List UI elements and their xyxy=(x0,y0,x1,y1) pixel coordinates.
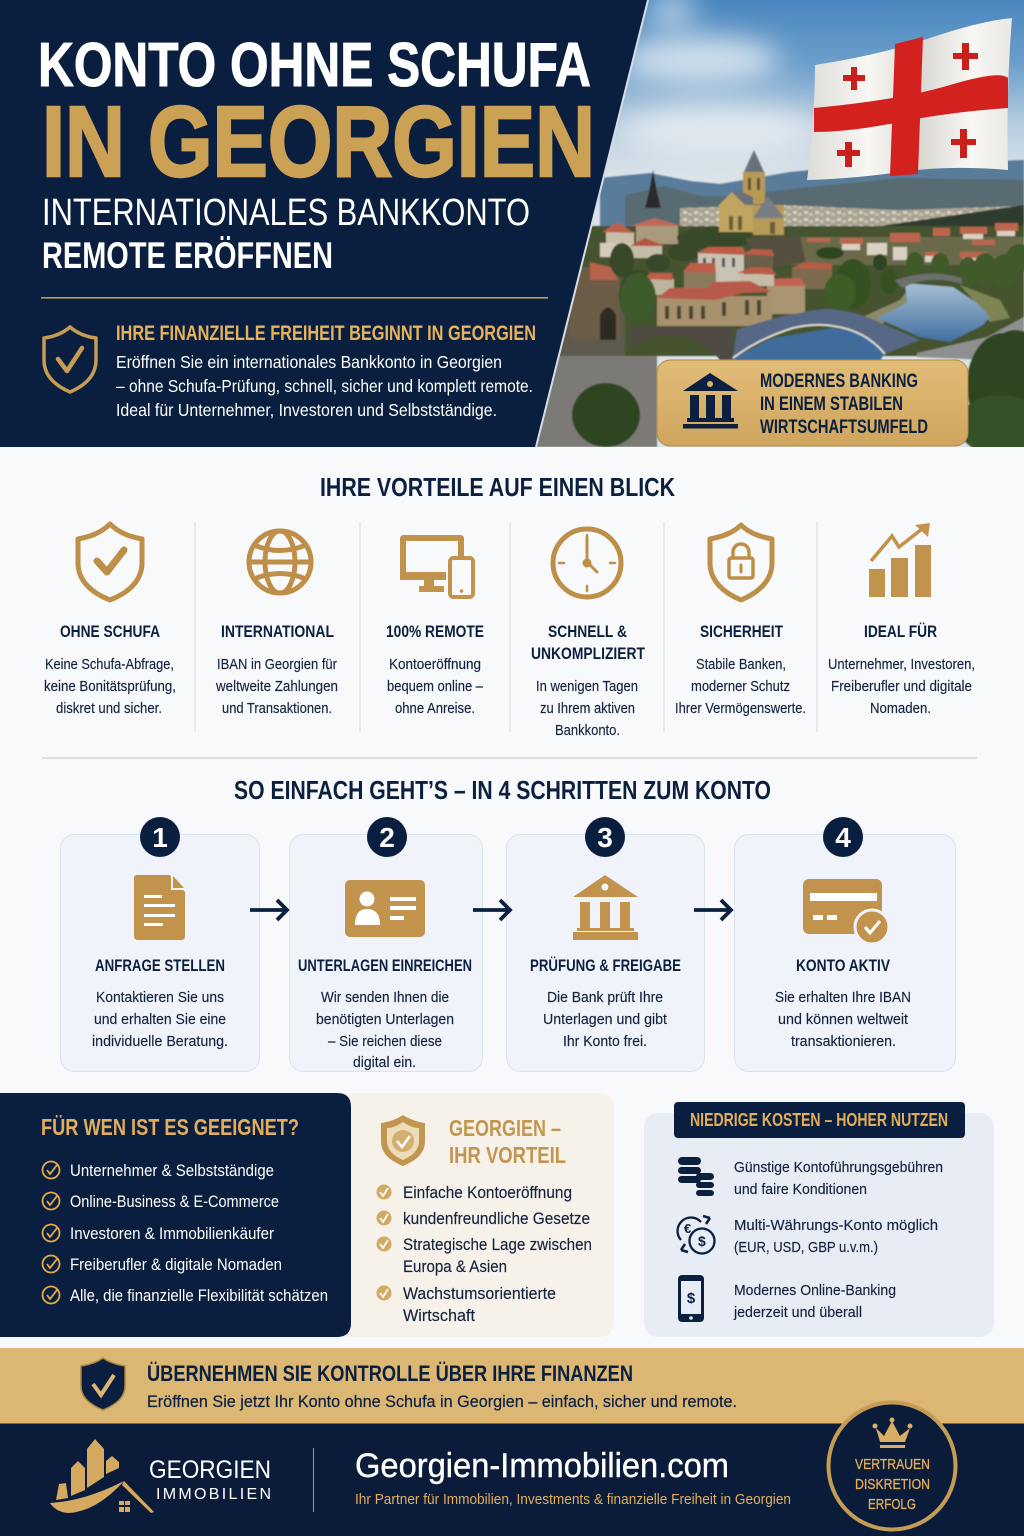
CTA copy: Eröffnen Sie jetzt Ihr Konto ohne Schufa in Georgien – einfach, sicher und remote. xyxy=(147,1392,737,1411)
benefit: sicherheit: Stabile Banken, xyxy=(696,656,786,673)
Georgian flag xyxy=(807,18,1012,180)
benefit: international: weltweite Zahlungen xyxy=(215,678,338,695)
arrow 3 xyxy=(694,900,731,920)
icon: document xyxy=(134,874,186,940)
step 4 card xyxy=(734,817,956,1072)
benefit: international: IBAN in Georgien für xyxy=(217,656,337,673)
step 3 card: Ihr Konto frei. xyxy=(563,1033,647,1050)
icon: ID card xyxy=(345,880,425,937)
title line 2: IN GEORGIEN xyxy=(42,86,595,198)
icon: growth chart xyxy=(869,523,931,597)
benefit: ohne Schufa: Keine Schufa-Abfrage, xyxy=(45,656,174,673)
heading: steps: SO EINFACH GEHT’S – IN 4 SCHRITTEN ZUM KONTO xyxy=(234,775,771,805)
benefit: ideal für: IDEAL FÜR xyxy=(864,622,937,641)
list: Freiberufler & digitale Nomaden xyxy=(70,1256,282,1274)
callout text: MODERNES BANKING xyxy=(760,371,918,392)
panel heading: FÜR WEN IST ES GEEIGNET? xyxy=(41,1114,299,1140)
benefit: schnell: zu Ihrem aktiven xyxy=(540,700,635,717)
step 2 card: UNTERLAGEN EINREICHEN xyxy=(298,956,472,975)
subtitle line 2: REMOTE ERÖFFNEN xyxy=(42,235,333,276)
church xyxy=(719,150,784,235)
benefit: schnell: In wenigen Tagen xyxy=(536,678,638,695)
step 3 card: Die Bank prüft Ihre xyxy=(547,989,663,1006)
header left panel xyxy=(0,0,660,447)
benefit: ohne Schufa xyxy=(44,524,176,717)
icon: currency exchange: $ xyxy=(698,1233,706,1249)
step 2 card: Wir senden Ihnen die xyxy=(321,989,449,1006)
panel: beige advantage xyxy=(330,1093,614,1337)
number badge 3: 3 xyxy=(597,822,613,853)
list: Investoren & Immobilienkäufer xyxy=(70,1225,274,1243)
subtitle line 1: INTERNATIONALES BANKKONTO xyxy=(42,192,530,234)
intro copy: Eröffnen Sie ein internationales Bankkonto in Georgien xyxy=(116,352,502,372)
stone bridge left xyxy=(630,327,733,360)
benefit: schnell: SCHNELL & xyxy=(548,622,627,641)
foreground trees xyxy=(572,330,1024,455)
benefit: remote: 100% REMOTE xyxy=(386,622,484,641)
step 4 card: Sie erhalten Ihre IBAN xyxy=(775,989,911,1006)
callout text: IN EINEM STABILEN xyxy=(760,394,903,415)
main title xyxy=(38,31,595,276)
benefit: sicherheit: moderner Schutz xyxy=(691,678,790,695)
benefit: ohne Schufa: OHNE SCHUFA xyxy=(60,622,160,641)
panel header: NIEDRIGE KOSTEN – HOHER NUTZEN xyxy=(690,1110,948,1130)
benefit: schnell xyxy=(531,529,645,739)
number badge 4: 4 xyxy=(835,822,851,853)
logo xyxy=(50,1439,271,1513)
list xyxy=(70,1162,328,1305)
icon: credit card check xyxy=(803,879,889,944)
step 1 card: Kontaktieren Sie uns xyxy=(96,989,224,1006)
number badge 1: 1 xyxy=(152,822,168,853)
central trees xyxy=(824,259,898,310)
benefit: international xyxy=(215,531,338,717)
benefit: international: und Transaktionen. xyxy=(222,700,332,717)
icon: gold shield xyxy=(381,1115,425,1166)
gold rule xyxy=(41,297,548,299)
step 1 card xyxy=(60,817,260,1072)
main red roof building xyxy=(657,281,772,326)
list: Einfache Kontoeröffnung xyxy=(403,1184,572,1202)
step 3 card: PRÜFUNG & FREIGABE xyxy=(530,956,681,975)
step 4 card: transaktionieren. xyxy=(791,1033,896,1050)
trust seal: VERTRAUEN xyxy=(855,1456,930,1473)
callout text xyxy=(760,371,928,438)
icon: currency exchange xyxy=(678,1216,714,1254)
icon: navy shield xyxy=(81,1358,125,1410)
number badge 4 xyxy=(823,817,863,857)
icon: coins xyxy=(678,1157,714,1196)
step 2 card xyxy=(290,817,482,1072)
icon: clock xyxy=(553,529,621,597)
icon: devices xyxy=(400,535,473,597)
benefit: sicherheit: Ihrer Vermögenswerte. xyxy=(675,700,806,717)
distant red-roofed quarter xyxy=(790,223,1024,270)
embankment xyxy=(864,292,908,324)
intro heading: IHRE FINANZIELLE FREIHEIT BEGINNT IN GEORGIEN xyxy=(116,322,536,345)
benefit: ohne Schufa: keine Bonitätsprüfung, xyxy=(44,678,176,695)
step 4 card: und können weltweit xyxy=(778,1011,909,1028)
panel heading xyxy=(449,1115,566,1168)
list: Europa & Asien xyxy=(403,1258,507,1276)
CTA heading: ÜBERNEHMEN SIE KONTROLLE ÜBER IHRE FINANZEN xyxy=(147,1361,633,1386)
logo: GEORGIEN xyxy=(149,1456,271,1484)
icon: shield lock xyxy=(710,525,772,600)
icon: currency exchange: € xyxy=(684,1221,691,1236)
hill trees xyxy=(610,228,752,306)
step 2 card: – Sie reichen diese xyxy=(328,1033,442,1050)
step 1 card: ANFRAGE STELLEN xyxy=(95,956,225,975)
footer xyxy=(0,1422,1024,1536)
benefit: remote: ohne Anreise. xyxy=(395,700,475,717)
list: Unternehmer & Selbstständige xyxy=(70,1162,274,1180)
benefit: sicherheit: SICHERHEIT xyxy=(700,622,783,641)
step 2 card: benötigten Unterlagen xyxy=(316,1011,454,1028)
number badge 1 xyxy=(140,817,180,857)
check icons xyxy=(42,1162,60,1304)
benefit: ideal für: Nomaden. xyxy=(870,700,931,717)
step 3 card xyxy=(506,817,704,1072)
benefit: remote: bequem online – xyxy=(387,678,484,695)
panel header xyxy=(674,1102,965,1138)
icon: crown xyxy=(872,1418,912,1448)
list: kundenfreundliche Gesetze xyxy=(403,1210,590,1228)
panel heading: IHR VORTEIL xyxy=(449,1142,566,1168)
header photo: Tbilisi skyline with flag xyxy=(530,0,1024,455)
icon: bank xyxy=(573,875,638,940)
heading: benefits: IHRE VORTEILE AUF EINEN BLICK xyxy=(320,472,675,502)
far bridge xyxy=(895,273,962,288)
step 3 card: Unterlagen und gibt xyxy=(543,1011,668,1028)
cost text: jederzeit und überall xyxy=(733,1304,862,1321)
title line 1: KONTO OHNE SCHUFA xyxy=(38,31,591,100)
tagline: Ihr Partner für Immobilien, Investments & finanzielle Freiheit in Georgien xyxy=(355,1492,791,1508)
arrow 1 xyxy=(250,900,287,920)
benefit: schnell: Bankkonto. xyxy=(555,722,620,739)
number badge 2 xyxy=(367,817,407,857)
website: Georgien-Immobilien.com xyxy=(355,1447,729,1485)
list xyxy=(376,1184,592,1325)
callout: modern banking xyxy=(657,360,968,446)
lower river xyxy=(733,328,885,362)
trust seal xyxy=(828,1402,956,1530)
cost text: Modernes Online-Banking xyxy=(734,1282,896,1299)
benefit: ideal für: Unternehmer, Investoren, xyxy=(828,656,975,673)
left tree xyxy=(620,273,656,323)
rock under church xyxy=(745,236,806,268)
number badge 2: 2 xyxy=(379,822,395,853)
right road xyxy=(917,317,1024,360)
peace bridge xyxy=(733,309,920,357)
benefit: ideal für: Freiberufler und digitale xyxy=(831,678,972,695)
list: Wirtschaft xyxy=(403,1307,475,1325)
icon: phone: $ xyxy=(687,1290,696,1307)
benefit: remote xyxy=(386,535,484,717)
list: Strategische Lage zwischen xyxy=(403,1236,592,1254)
cost text: Günstige Kontoführungsgebühren xyxy=(734,1159,943,1176)
list: Online-Business & E-Commerce xyxy=(70,1193,279,1211)
buildings left hill xyxy=(560,217,681,356)
benefit: ohne Schufa: diskret und sicher. xyxy=(56,700,162,717)
page background xyxy=(0,447,1024,1348)
logo: IMMOBILIEN xyxy=(156,1486,271,1503)
cost text xyxy=(733,1159,943,1321)
benefit: international: INTERNATIONAL xyxy=(221,622,334,641)
intro text block xyxy=(116,322,536,420)
step 1 card: und erhalten Sie eine xyxy=(94,1011,226,1028)
cost text: Multi-Währungs-Konto möglich xyxy=(734,1217,938,1234)
icon: bank xyxy=(683,373,738,428)
call to action band xyxy=(0,1348,1024,1423)
intro copy: Ideal für Unternehmer, Investoren und Selbstständige. xyxy=(116,400,497,420)
list: Alle, die finanzielle Flexibilität schätzen xyxy=(70,1287,328,1305)
panel: costs xyxy=(644,1102,994,1337)
step 2 card: digital ein. xyxy=(353,1054,416,1071)
icon: shield check xyxy=(78,524,142,600)
icon: shield check xyxy=(44,327,96,392)
dark spire xyxy=(645,170,661,208)
mid buildings xyxy=(645,262,832,314)
step 1 card: individuelle Beratung. xyxy=(92,1033,228,1050)
icon: globe xyxy=(249,531,311,593)
benefit: ideal für xyxy=(828,523,975,717)
white building xyxy=(697,247,774,282)
trust seal: ERFOLG xyxy=(868,1496,916,1513)
intro copy: – ohne Schufa-Prüfung, schnell, sicher und komplett remote. xyxy=(116,376,533,396)
upper river xyxy=(877,283,990,342)
benefit: sicherheit xyxy=(675,525,806,717)
icon: phone xyxy=(678,1275,704,1322)
intro copy xyxy=(116,352,533,420)
panel heading: GEORGIEN – xyxy=(449,1115,561,1141)
cost text: (EUR, USD, GBP u.v.m.) xyxy=(734,1239,878,1256)
panel: target group xyxy=(0,1093,351,1337)
step 4 card: KONTO AKTIV xyxy=(796,956,891,975)
diagonal panel edge xyxy=(536,0,648,447)
cost text: und faire Konditionen xyxy=(734,1181,867,1198)
benefit: schnell: UNKOMPLIZIERT xyxy=(531,644,645,663)
right trees xyxy=(906,244,1024,272)
number badge 3 xyxy=(585,817,625,857)
callout text: WIRTSCHAFTSUMFELD xyxy=(760,417,928,438)
arrow 2 xyxy=(473,900,510,920)
list: Wachstumsorientierte xyxy=(403,1285,556,1303)
benefit: remote: Kontoeröffnung xyxy=(389,656,481,673)
trust seal: DISKRETION xyxy=(855,1476,930,1493)
